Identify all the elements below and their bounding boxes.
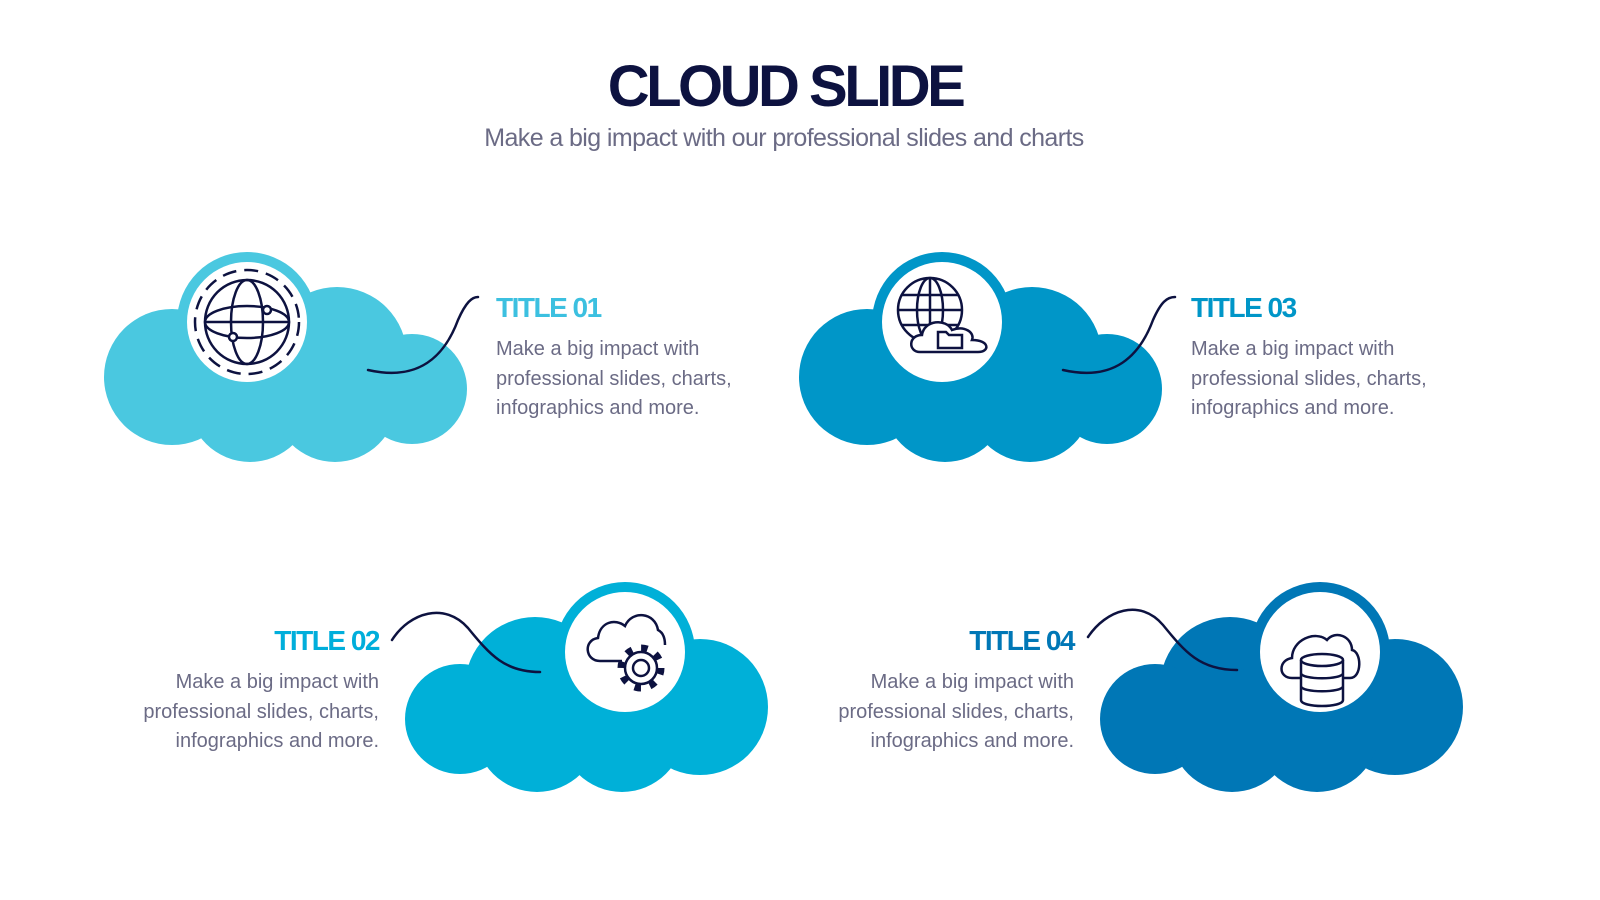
cloud 2 [405, 582, 768, 792]
white circles [187, 262, 1380, 712]
cloud 4 [1100, 582, 1463, 792]
subtitle: Make a big impact with our professional slides and charts [484, 124, 1084, 152]
text block: title 03: professional slides, charts, [1191, 368, 1427, 390]
cloud 3 [799, 252, 1162, 462]
icon: globe cloud folder [898, 278, 986, 352]
text block: title 01: TITLE 01 [496, 292, 601, 323]
text block: title 02: TITLE 02 [274, 625, 379, 656]
text block: title 02: professional slides, charts, [143, 700, 379, 722]
text block: title 02: Make a big impact with [176, 671, 379, 693]
text block: title 01: professional slides, charts, [496, 368, 732, 390]
connector curves [368, 297, 1237, 672]
text block: title 03: infographics and more. [1191, 397, 1394, 419]
text block: title 04: Make a big impact with [871, 671, 1074, 693]
text block: title 04: infographics and more. [871, 730, 1074, 752]
text block: title 02: infographics and more. [176, 730, 379, 752]
text block: title 03: Make a big impact with [1191, 338, 1394, 360]
icon: cloud gear [588, 615, 665, 688]
title: CLOUD SLIDE [608, 54, 962, 119]
text block: title 04: professional slides, charts, [838, 700, 1074, 722]
text block: title 01: Make a big impact with [496, 338, 699, 360]
text block: title 01: infographics and more. [496, 397, 699, 419]
icon: globe [195, 270, 299, 374]
cloud 1 [104, 252, 467, 462]
icon: cloud database [1282, 635, 1359, 706]
text block: title 04: TITLE 04 [969, 625, 1074, 656]
text block: title 03: TITLE 03 [1191, 292, 1296, 323]
